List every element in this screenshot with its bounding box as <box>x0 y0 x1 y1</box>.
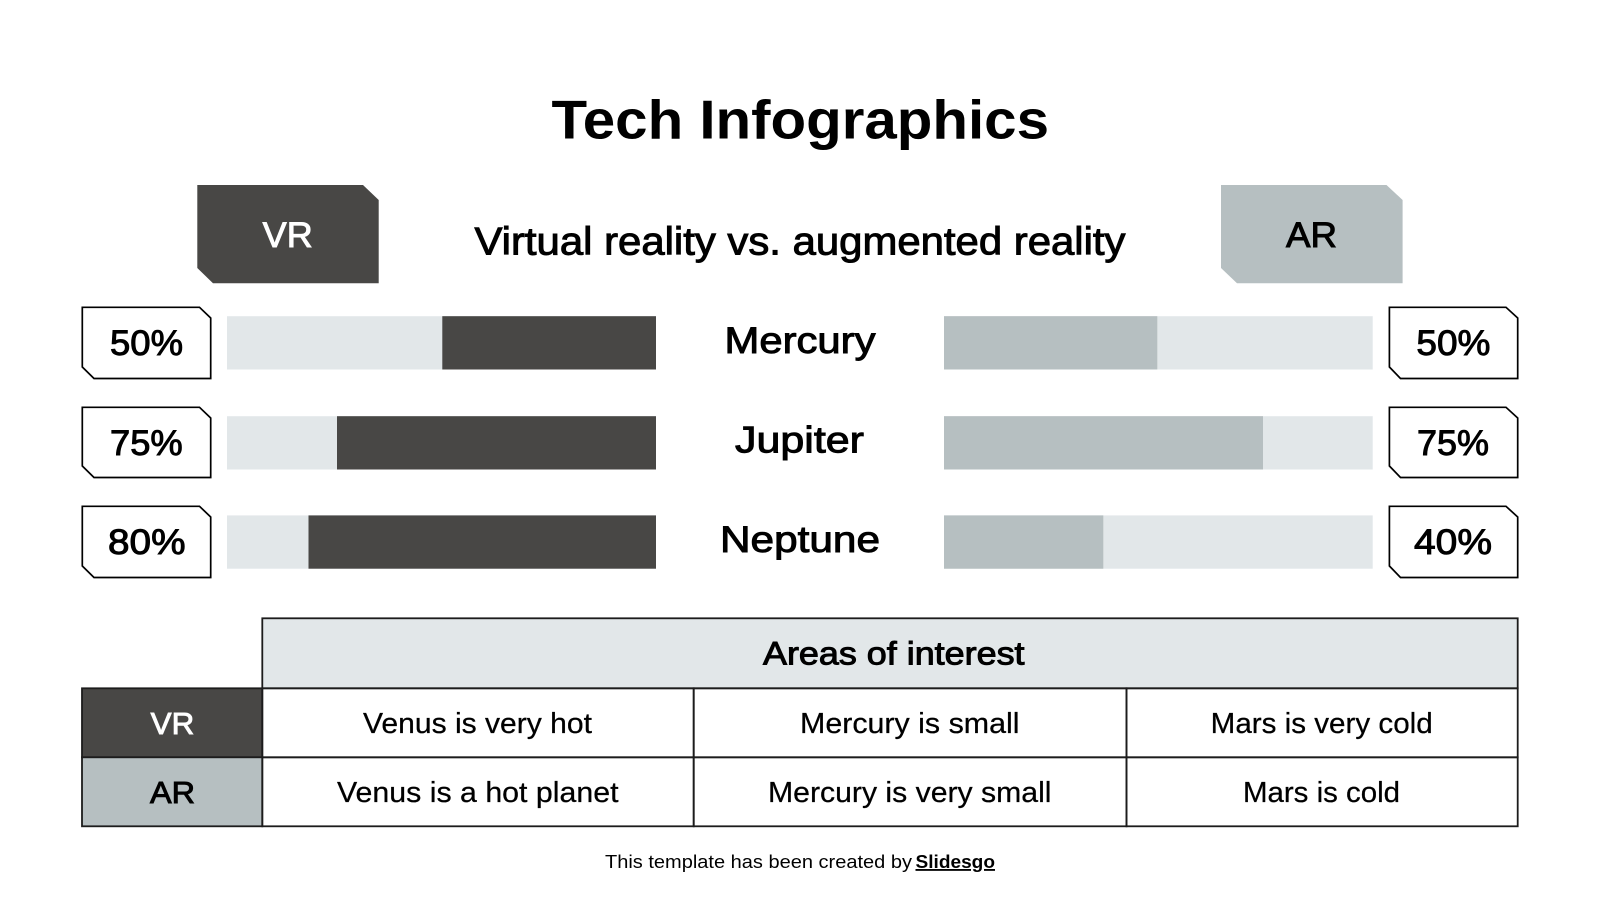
AR percent badge 40% <box>1389 506 1518 578</box>
label Mercury: Mercury <box>724 320 876 361</box>
footer credit: Slidesgo <box>916 851 995 872</box>
row header AR <box>82 757 262 826</box>
label Neptune: Neptune <box>720 519 880 560</box>
VR header tag <box>197 185 379 283</box>
table: areas of interest <box>82 618 1518 826</box>
VR percent badge 50%: 50% <box>110 324 183 363</box>
AR bar 75% <box>944 416 1373 470</box>
AR header tag <box>1221 185 1403 283</box>
subtitle: Virtual reality vs. augmented reality <box>474 220 1126 264</box>
VR percent badge 80%: 80% <box>108 523 186 562</box>
cell: Venus is very hot: Venus is very hot <box>363 708 592 740</box>
table header: Areas of interest <box>763 636 1025 672</box>
VR percent badge 50% <box>82 307 211 378</box>
table header <box>262 618 1518 688</box>
cell: Mercury is very small: Mercury is very small <box>768 777 1052 809</box>
VR bar 75% <box>227 416 656 470</box>
AR percent badge 75%: 75% <box>1417 424 1489 463</box>
cell: Mars is very cold: Mars is very cold <box>1211 708 1433 740</box>
cell: Venus is a hot planet <box>262 757 694 826</box>
table row: AR <box>82 757 1518 826</box>
cell: Mercury is very small <box>694 757 1126 826</box>
row header VR <box>82 688 262 757</box>
label Jupiter: Jupiter <box>735 420 864 460</box>
title: Tech Infographics <box>552 88 1049 150</box>
AR percent badge 40%: 40% <box>1414 523 1492 562</box>
row header AR: AR <box>150 775 195 810</box>
cell: Mercury is small: Mercury is small <box>800 708 1020 740</box>
AR percent badge 75% <box>1389 407 1518 478</box>
footer credit: This template has been created by <box>605 851 913 872</box>
VR bar 80% <box>227 515 656 569</box>
row: Mercury <box>82 307 1518 378</box>
VR header tag: VR <box>263 216 313 255</box>
cell: Mars is very cold <box>1126 688 1518 757</box>
VR bar 50% <box>227 316 656 370</box>
table row: VR <box>82 688 1518 757</box>
row: Jupiter <box>82 407 1518 478</box>
cell: Venus is very hot <box>262 688 694 757</box>
VR percent badge 75% <box>82 407 211 478</box>
AR bar 50% <box>944 316 1373 370</box>
cell: Mercury is small <box>694 688 1126 757</box>
cell: Mars is cold <box>1126 757 1518 826</box>
cell: Venus is a hot planet: Venus is a hot planet <box>337 777 619 809</box>
row header VR: VR <box>151 706 194 741</box>
AR percent badge 50% <box>1389 307 1518 378</box>
row: Neptune <box>82 506 1518 578</box>
AR bar 40% <box>944 515 1373 569</box>
AR header tag: AR <box>1286 216 1337 255</box>
cell: Mars is cold: Mars is cold <box>1243 777 1400 809</box>
VR percent badge 75%: 75% <box>110 424 183 463</box>
AR percent badge 50%: 50% <box>1416 324 1490 363</box>
VR percent badge 80% <box>82 506 211 578</box>
